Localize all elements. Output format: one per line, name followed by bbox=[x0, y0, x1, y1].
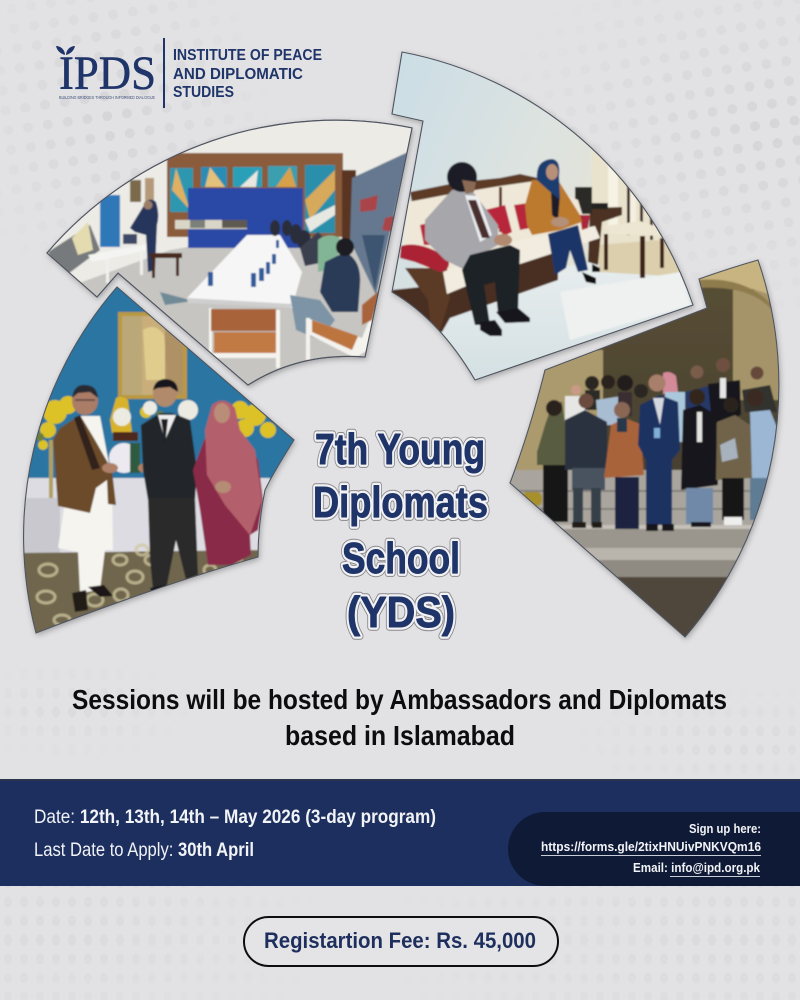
red cushions bbox=[400, 244, 449, 272]
institute name: AND DIPLOMATIC bbox=[173, 66, 303, 83]
woman head bbox=[537, 159, 560, 200]
chair right bbox=[306, 290, 380, 360]
speaker bbox=[130, 200, 158, 272]
man left jacket bbox=[53, 415, 116, 513]
front row man blue suit bbox=[638, 374, 680, 531]
date text: Date: 12th, 13th, 14th – May 2026 (3-day program) bbox=[34, 806, 436, 828]
painting bbox=[118, 312, 187, 399]
seated attendees bbox=[270, 220, 325, 266]
sign-up panel: Email: info@ipd.org.pk bbox=[633, 860, 761, 875]
side table and chair bbox=[588, 207, 622, 265]
photo: group on steps bbox=[500, 255, 790, 647]
subtitle bbox=[72, 684, 727, 751]
title: School bbox=[342, 534, 460, 583]
front row man bbox=[565, 394, 607, 528]
institute name: STUDIES bbox=[173, 84, 234, 101]
chair front bbox=[209, 308, 280, 368]
title: (YDS) bbox=[347, 588, 455, 637]
logo wordmark: IPDS bbox=[59, 47, 156, 100]
woman bbox=[193, 425, 263, 565]
info band bbox=[0, 779, 800, 886]
title: School bbox=[342, 534, 460, 583]
deadline text: Last Date to Apply: 30th April bbox=[34, 839, 254, 861]
subtitle: based in Islamabad bbox=[285, 720, 515, 751]
title: (YDS) bbox=[347, 588, 455, 637]
man head bbox=[447, 162, 477, 192]
title: School bbox=[342, 534, 460, 583]
gold walls bbox=[515, 349, 604, 471]
side pictures and banner bbox=[130, 180, 141, 202]
institute name: INSTITUTE OF PEACE bbox=[173, 47, 322, 64]
sofa base carving bbox=[392, 250, 558, 335]
front row woman black coat bbox=[681, 389, 718, 527]
flowers bbox=[38, 396, 276, 450]
gift ball bbox=[109, 443, 139, 473]
photo: conference room bbox=[40, 120, 420, 390]
lectern table bbox=[88, 244, 148, 262]
right doorway bbox=[592, 150, 626, 240]
sofa seat bbox=[443, 226, 600, 294]
woman jacket bbox=[525, 180, 582, 235]
man middle suit bbox=[141, 413, 197, 500]
title: 7th Young bbox=[315, 425, 485, 474]
institute name bbox=[173, 47, 322, 101]
man middle head bbox=[153, 379, 177, 407]
logo: IPDS bbox=[56, 38, 322, 108]
wall painting bbox=[350, 152, 408, 295]
title: 7th Young bbox=[315, 425, 485, 474]
photo: sofa meeting bbox=[390, 51, 696, 384]
floor bbox=[81, 236, 380, 384]
registration fee pill bbox=[244, 917, 558, 966]
title bbox=[313, 425, 488, 637]
flowers bbox=[522, 492, 542, 506]
title: (YDS) bbox=[347, 588, 455, 637]
stained glass window bbox=[167, 153, 343, 237]
long table bbox=[187, 235, 302, 308]
man middle trousers bbox=[148, 498, 198, 590]
sign-up panel bbox=[508, 812, 800, 886]
back row bbox=[565, 358, 777, 442]
sign-up panel: https://forms.gle/2tixHNUivPNKVQm16 bbox=[541, 839, 761, 854]
hands bbox=[494, 234, 512, 246]
man left head bbox=[72, 387, 98, 415]
sign-up panel: Sign up here: bbox=[689, 821, 761, 836]
front row woman olive bbox=[537, 400, 568, 522]
registration fee pill: Registartion Fee: Rs. 45,000 bbox=[264, 928, 536, 953]
bottles bbox=[208, 240, 279, 287]
subtitle: Sessions will be hosted by Ambassadors and Diplomats bbox=[72, 684, 727, 715]
front row woman rust coat bbox=[604, 402, 644, 529]
man jacket bbox=[425, 188, 498, 270]
background bbox=[48, 38, 800, 202]
title: 7th Young bbox=[315, 425, 485, 474]
blue backdrop bbox=[188, 188, 303, 248]
sofa frame crest bbox=[410, 174, 538, 202]
carpet bbox=[20, 550, 270, 640]
woman trousers bbox=[548, 225, 588, 275]
front row woman light blue bbox=[746, 390, 778, 520]
marble floor bbox=[447, 262, 692, 379]
icon: leaves bbox=[56, 46, 75, 55]
title: Diplomats bbox=[313, 478, 488, 527]
white table bbox=[20, 478, 270, 553]
man left kurta bbox=[58, 416, 113, 593]
gold stand and trophy bbox=[49, 440, 53, 498]
front row woman olive coat bbox=[716, 398, 752, 525]
title: Diplomats bbox=[313, 478, 488, 527]
steps bbox=[510, 468, 754, 526]
door bbox=[342, 170, 356, 240]
sofa back bbox=[402, 180, 584, 270]
man trousers and shoes bbox=[462, 245, 520, 325]
logo tagline: BUILDING BRIDGES THROUGH INFORMED DIALOGUE bbox=[59, 95, 155, 100]
title: Diplomats bbox=[313, 478, 488, 527]
photo: presentation of gift bbox=[20, 280, 310, 640]
shoes left bbox=[72, 590, 88, 612]
